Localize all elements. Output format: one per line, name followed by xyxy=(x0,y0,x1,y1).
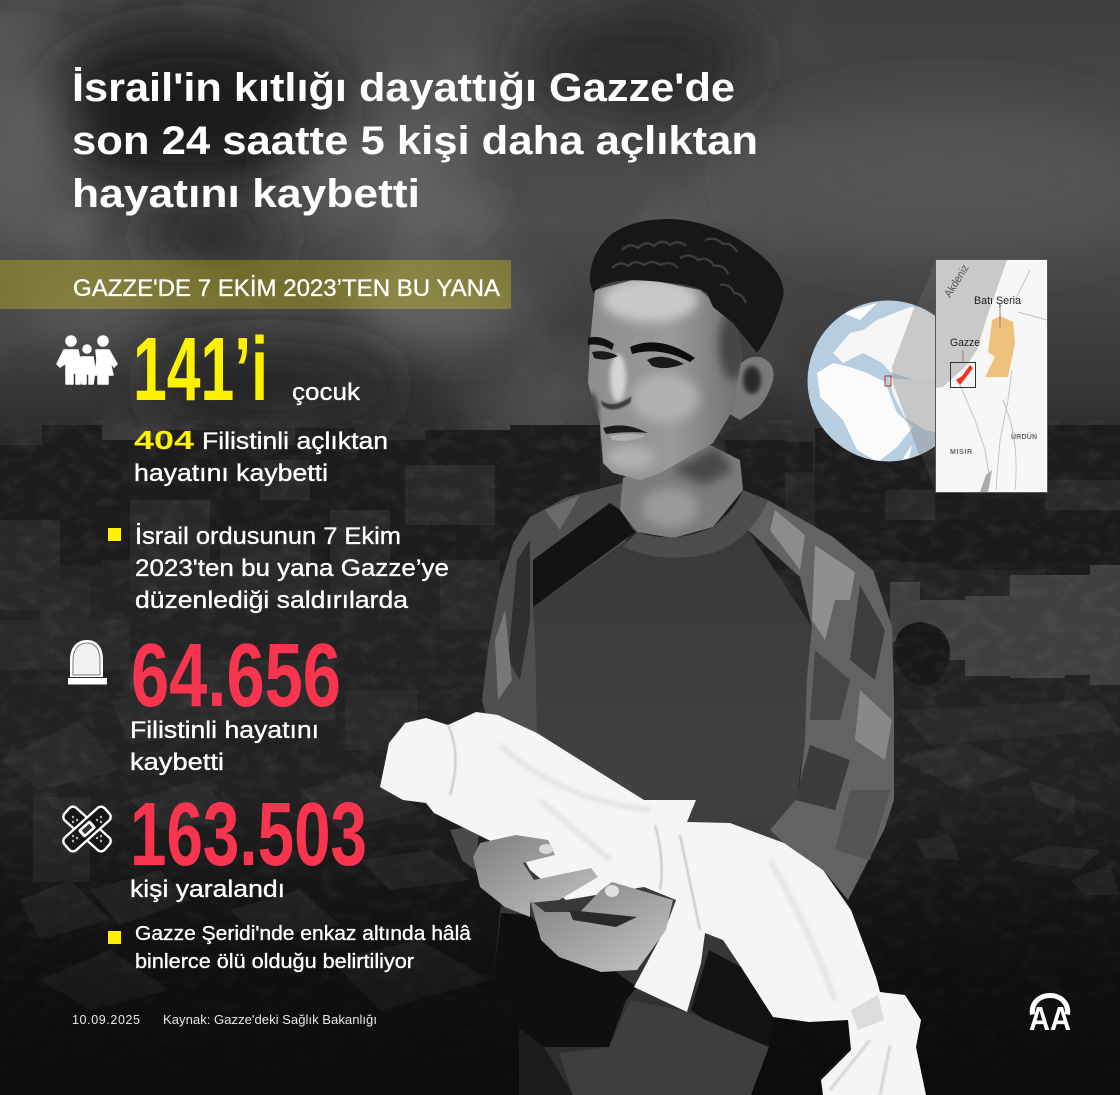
wedge over globe xyxy=(892,306,935,454)
icon: bandages xyxy=(61,805,113,853)
map labels xyxy=(942,263,1037,456)
bullet text: Israeli attacks: İsrail ordusunun 7 Ekim xyxy=(135,523,401,550)
map labels: Batı Şeria xyxy=(974,295,1022,307)
hair xyxy=(590,219,784,353)
stat: 163.503 wounded: kişi yaralandı xyxy=(130,876,285,903)
text: 404 died of hunger: hayatını kaybetti xyxy=(134,460,328,487)
stat: 141'i children: 141’i xyxy=(133,320,268,420)
title: son 24 saatte 5 kişi daha açlıktan xyxy=(72,119,758,163)
photo: young man xyxy=(380,219,926,1095)
man's torso xyxy=(494,530,812,1095)
stat: 163.503 wounded xyxy=(130,785,367,903)
heading band: since 7 October: GAZZE'DE 7 EKİM 2023’TEN BU YANA xyxy=(73,275,500,302)
stat: 64.656 killed xyxy=(130,626,341,776)
right sleeve xyxy=(748,500,894,900)
sweater collar xyxy=(623,490,768,558)
icon: tombstone xyxy=(68,640,107,684)
decorative tents and rubble xyxy=(0,690,1120,1010)
map labels: MISIR xyxy=(950,449,972,456)
bullet text: Israeli attacks: düzenlediği saldırılarda xyxy=(135,587,409,614)
stat: 64.656 killed: kaybetti xyxy=(130,749,224,776)
ear xyxy=(728,357,773,420)
text: 404 died of hunger: Filistinli açlıktan xyxy=(202,428,388,455)
facial features xyxy=(588,337,614,350)
Gaza box xyxy=(963,306,1000,362)
title xyxy=(72,66,758,216)
globe xyxy=(808,300,935,462)
stat: 64.656 killed: Filistinli hayatını xyxy=(130,717,319,744)
title: İsrail'in kıtlığı dayattığı Gazze'de xyxy=(72,66,735,110)
bullet text: under rubble: Gazze Şeridi'nde enkaz altında hâlâ xyxy=(135,923,472,945)
text: 404 died of hunger: 404 xyxy=(134,425,195,455)
face xyxy=(585,278,747,480)
bullet text: under rubble xyxy=(108,923,472,973)
heading band: since 7 October xyxy=(0,260,511,309)
West Bank xyxy=(985,316,1015,377)
icon: family xyxy=(57,336,117,384)
stat: 163.503 wounded: 163.503 xyxy=(130,785,367,885)
neck xyxy=(620,440,743,538)
text: 404 died of hunger xyxy=(134,425,388,487)
bullet text: under rubble: binlerce ölü olduğu belirtiliyor xyxy=(135,951,414,973)
map labels: Akdeniz xyxy=(942,263,972,300)
footer: date and source: 10.09.2025 xyxy=(72,1013,140,1027)
bullet text: Israeli attacks xyxy=(108,523,449,614)
stat: 64.656 killed: 64.656 xyxy=(131,626,341,726)
bullet text: Israeli attacks: 2023'ten bu yana Gazze’ye xyxy=(135,555,449,582)
map labels: ÜRDÜN xyxy=(1011,432,1037,441)
decorative skyline xyxy=(0,420,1120,575)
wedge between globe and map xyxy=(892,260,936,492)
inset map xyxy=(936,260,1048,492)
hands xyxy=(473,835,673,972)
locator map: globe and inset xyxy=(808,260,1048,492)
dark forearms and lower shirt xyxy=(450,825,773,1095)
left sleeve xyxy=(482,483,635,735)
title: hayatını kaybetti xyxy=(72,172,420,216)
footer: date and source: Kaynak: Gazze'deki Sağlık Bakanlığı xyxy=(163,1013,377,1027)
shroud xyxy=(380,712,926,1095)
logo: AA: AA xyxy=(1029,1000,1071,1037)
map labels: Gazze xyxy=(950,337,980,349)
footer: date and source xyxy=(72,1013,377,1027)
stat: 141'i children: çocuk xyxy=(292,379,361,406)
